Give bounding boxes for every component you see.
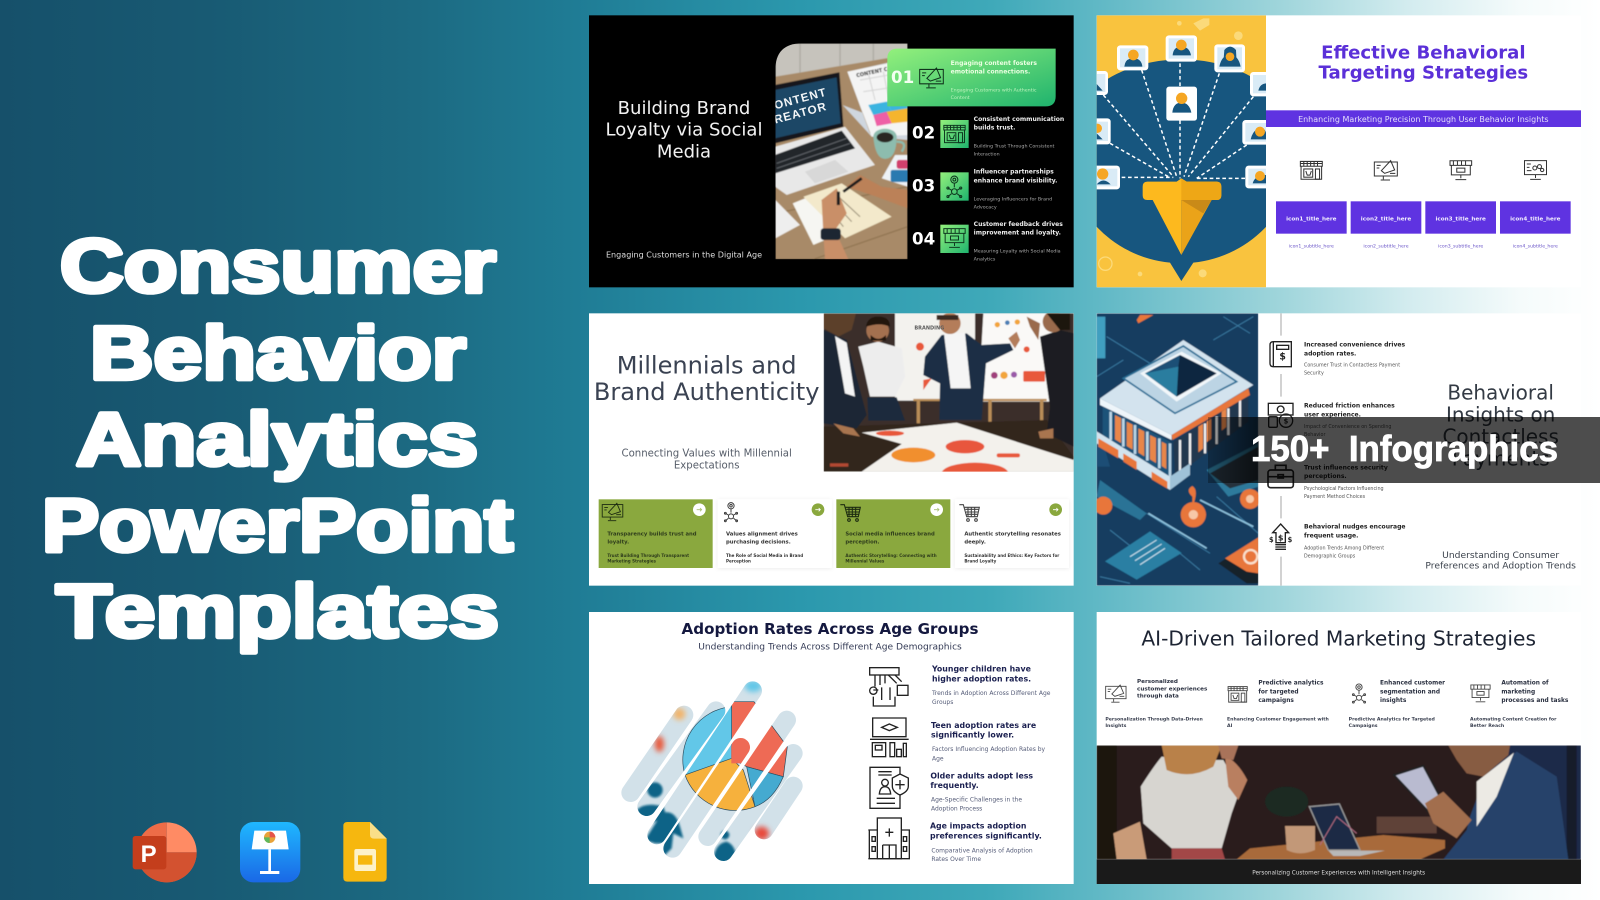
- subtitle: consumer preferences: Understanding Consumer: [1442, 550, 1559, 561]
- heading: effective behavioral targeting: [1319, 43, 1528, 83]
- illustration: funnel and profiles: [1096, 15, 1266, 288]
- banner: subtitle: [1266, 110, 1581, 127]
- card: item 01 highlighted: [887, 49, 1056, 106]
- columns: [1103, 407, 1170, 477]
- pins: [1189, 486, 1196, 507]
- column: personalized: customer experiences: [1137, 686, 1208, 692]
- panel: behavioral targeting: [1065, 15, 1581, 287]
- boxes row: icon1_subtitle_here: [1289, 243, 1334, 249]
- column: personalized: through data: [1137, 693, 1179, 699]
- icon and text: older adults: Age-Specific Challenges in the: [931, 797, 1022, 804]
- item: convenience: adoption rates.: [1304, 350, 1356, 357]
- icon and text: teen adoption: [870, 718, 1046, 762]
- card: item 01 highlighted: Content: [951, 95, 970, 101]
- column: automation: marketing: [1501, 689, 1535, 695]
- item: reduced friction: Behavior: [1304, 432, 1325, 438]
- icon and text: age impacts: preferences significantly.: [930, 831, 1042, 840]
- column: segmentation: insights: [1380, 698, 1407, 704]
- title: Templates: [56, 569, 499, 653]
- item: reduced friction: [1268, 402, 1395, 438]
- column: personalized: Personalized: [1137, 679, 1178, 685]
- subtitle: digital age: Engaging Customers in the Digital Age: [606, 251, 762, 260]
- subtitle: consumer preferences: Preferences and Adoption Trends: [1425, 560, 1576, 571]
- card: values alignment: Perception: [726, 559, 751, 564]
- column: automation: Automation of: [1501, 681, 1549, 687]
- heading: building brand loyalty: [605, 98, 763, 162]
- icon and text: younger children: higher adoption rates.: [932, 674, 1031, 683]
- boxes row: icon3_subtitle_here: [1438, 243, 1483, 249]
- photo: customer conversation over tablet: [1097, 745, 1581, 859]
- card: values alignment: The Role of Social Media in Brand: [726, 553, 803, 558]
- heading: contactless payments: Payments: [1452, 446, 1550, 470]
- card: authentic storytelling: deeply.: [964, 539, 986, 545]
- heading: adoption rates: Adoption Rates Across Age Groups: [682, 620, 978, 638]
- icon and text: teen adoption: Teen adoption rates are: [931, 721, 1036, 730]
- icon and text: age impacts: Rates Over Time: [931, 856, 981, 863]
- card: values alignment: [718, 499, 832, 568]
- photo: team at branding board: [824, 311, 1074, 484]
- app icons: [133, 822, 387, 882]
- column: predictive analytics: AI: [1227, 723, 1233, 729]
- item: reduced friction: user experience.: [1304, 411, 1361, 418]
- column: automation: [1470, 681, 1569, 729]
- item 02: 02: [912, 124, 935, 143]
- column: segmentation: segmentation and: [1380, 689, 1440, 695]
- icon and text: younger children: [870, 665, 1051, 706]
- panel: building brand loyalty: [589, 15, 1074, 287]
- laptop: [775, 72, 843, 143]
- chart: sliced pie illustration: [621, 681, 803, 861]
- item: behavioral nudges: $: [1288, 536, 1293, 544]
- item 02: builds trust.: [974, 125, 1015, 132]
- item 03: [912, 169, 1057, 210]
- overlay band: 150+ Infographics: 150+ Infographics: [1251, 428, 1558, 469]
- icon and text: age impacts: Comparative Analysis of Adoption: [931, 847, 1033, 854]
- heading: contactless payments: Insights on: [1446, 402, 1555, 426]
- title: Behavior: [90, 311, 466, 395]
- icon and text: teen adoption: significantly lower.: [931, 731, 1014, 740]
- heading: millennials: Brand Authenticity: [594, 378, 819, 406]
- icon and text: teen adoption: Factors Influencing Adoption Rates by: [932, 746, 1046, 753]
- card: social media: Authentic Storytelling: Connecting with: [845, 553, 937, 558]
- card: social media: Social media influences brand: [845, 532, 935, 538]
- photo: team at branding board: BRANDING: [914, 325, 944, 331]
- item 03: Advocacy: [974, 204, 997, 210]
- item: reduced friction: Impact of Convenience on Spending: [1304, 424, 1391, 430]
- card: transparency: loyalty.: [607, 539, 629, 545]
- item 02: Interaction: [974, 152, 1000, 158]
- data card and tablet: [1105, 531, 1182, 580]
- icon and text: older adults: Older adults adopt less: [930, 771, 1033, 780]
- card: item 01 highlighted: Engaging content fosters: [951, 60, 1037, 67]
- item: convenience: Increased convenience drives: [1304, 342, 1406, 349]
- illustration: isometric bank: [1094, 313, 1260, 586]
- heading: building brand loyalty: Media: [657, 141, 711, 162]
- card: values alignment: Values alignment drives: [726, 532, 798, 538]
- item 03: 03: [912, 176, 935, 195]
- photo: content creator desk: CONTENT C: [856, 67, 889, 79]
- screen text: REATOR: [773, 100, 828, 127]
- item 04: Measuring Loyalty with Social Media: [974, 249, 1061, 255]
- item: behavioral nudges: Demographic Groups: [1304, 553, 1356, 559]
- icon: PowerPoint: P: [141, 841, 157, 868]
- item: convenience: Consumer Trust in Contactless Payment: [1304, 363, 1400, 369]
- item: behavioral nudges: frequent usage.: [1304, 532, 1358, 539]
- card: item 01 highlighted: 01: [891, 68, 914, 87]
- boxes row: icon4_subtitle_here: [1513, 243, 1558, 249]
- item: reduced friction: $: [1284, 417, 1289, 425]
- overlay band: 150+ Infographics: [1208, 417, 1600, 483]
- item 04: improvement and loyalty.: [974, 230, 1061, 237]
- item: convenience: $: [1279, 351, 1286, 362]
- card: authentic storytelling: Brand Loyalty: [964, 559, 997, 564]
- item 04: [912, 221, 1063, 262]
- panel: behavioral insights on contactless payments: [1094, 313, 1581, 586]
- column: automation: Automating Content Creation for: [1470, 717, 1557, 723]
- item: trust and security: Psychological Factors Influencing: [1304, 486, 1384, 492]
- column: predictive analytics: campaigns: [1258, 698, 1294, 704]
- item 02: Consistent communication: [974, 116, 1064, 123]
- heading: contactless payments: [1442, 380, 1559, 470]
- card: values alignment: purchasing decisions.: [726, 539, 791, 545]
- column: personalized: Insights: [1105, 723, 1127, 729]
- card: social media: Millennial Values: [845, 559, 885, 564]
- column: segmentation: Campaigns: [1349, 723, 1378, 729]
- column: predictive analytics: Enhancing Customer Engagement with: [1227, 717, 1329, 723]
- item: trust and security: Trust influences security: [1304, 464, 1388, 471]
- item 02: Building Trust Through Consistent: [974, 144, 1054, 150]
- item: convenience: [1270, 342, 1406, 377]
- caption bar: Personalizing Customer Experiences with Intelligent Insights: [1252, 870, 1425, 876]
- card: social media: [836, 499, 950, 568]
- item: behavioral nudges: Adoption Trends Among Different: [1304, 545, 1384, 551]
- icon and text: older adults: [870, 767, 1033, 813]
- card: social media: perception.: [845, 539, 880, 545]
- title: Consumer: [60, 224, 496, 308]
- icon and text: age impacts: [868, 818, 1042, 863]
- heading: effective behavioral targeting: Targeting Strategies: [1319, 62, 1528, 83]
- item 03: Influencer partnerships: [974, 169, 1054, 176]
- caption bar: [1097, 859, 1581, 884]
- cup: [873, 137, 897, 159]
- column: personalized: [1105, 679, 1208, 729]
- boxes row: icon2_title_here: [1361, 216, 1411, 222]
- icon: Keynote: [240, 822, 300, 882]
- column: segmentation: Enhanced customer: [1380, 681, 1445, 687]
- heading: effective behavioral targeting: Effective Behavioral: [1321, 43, 1526, 64]
- boxes row: icon2_subtitle_here: [1363, 243, 1409, 249]
- item 04: Analytics: [974, 256, 996, 262]
- notebook and hands: [775, 200, 800, 238]
- item: convenience: Security: [1304, 371, 1324, 377]
- column: personalized: Personalization Through Data-Driven: [1105, 717, 1203, 723]
- column: predictive analytics: [1227, 681, 1329, 729]
- heading: millennials: Millennials and: [617, 352, 797, 380]
- item: behavioral nudges: [1269, 524, 1406, 559]
- panel: adoption rates across age groups: [589, 612, 1074, 884]
- heading: contactless payments: Contactless: [1442, 424, 1559, 448]
- social card: [882, 155, 908, 187]
- calendar: [843, 58, 908, 140]
- column: predictive analytics: for targeted: [1258, 689, 1299, 695]
- item: reduced friction: Reduced friction enhances: [1304, 402, 1395, 409]
- item: behavioral nudges: $: [1269, 536, 1274, 544]
- boxes row: icon1_title_here: [1286, 216, 1337, 222]
- column: segmentation: [1349, 681, 1445, 729]
- item 03: enhance brand visibility.: [974, 177, 1057, 184]
- item: trust and security: perceptions.: [1304, 473, 1347, 480]
- card: transparency: Marketing Strategies: [607, 559, 657, 564]
- item 04: Customer feedback drives: [974, 221, 1063, 228]
- card: authentic storytelling: Authentic storytelling resonates: [964, 532, 1061, 538]
- card: authentic storytelling: Sustainability and Ethics: Key Factors for: [964, 553, 1059, 558]
- banner: subtitle: Enhancing Marketing Precision Through User Behavior Insights: [1298, 115, 1549, 124]
- item: trust and security: [1268, 464, 1388, 500]
- column: automation: processes and tasks: [1501, 698, 1569, 704]
- item 03: Leveraging Influencers for Brand: [974, 196, 1052, 202]
- subtitle: connecting values: Expectations: [674, 461, 740, 472]
- card: item 01 highlighted: emotional connections.: [951, 69, 1030, 76]
- icon: PowerPoint: [133, 822, 197, 882]
- panel: millennials and brand authenticity: [589, 311, 1074, 586]
- icon and text: younger children: Trends in Adoption Across Different Age: [931, 690, 1051, 697]
- item 04: 04: [912, 230, 935, 249]
- icon: Google Slides: [343, 822, 387, 882]
- icon and text: older adults: Adoption Process: [931, 806, 982, 813]
- photo: content creator desk: [773, 43, 909, 259]
- icon and text: younger children: Groups: [932, 699, 953, 706]
- platform: [1207, 443, 1258, 497]
- title: PowerPoint: [42, 483, 513, 567]
- roof: [1100, 340, 1253, 435]
- item: behavioral nudges: $: [1278, 534, 1284, 543]
- card: transparency: Trust Building Through Transparent: [607, 553, 689, 558]
- subtitle: connecting values: Connecting Values with Millennial: [621, 449, 792, 460]
- timeline: vertical line segments: [1279, 313, 1283, 586]
- icon and text: older adults: frequently.: [930, 781, 979, 790]
- boxes row: icon4_title_here: [1510, 216, 1561, 222]
- subtitle: age demographics: Understanding Trends Across Different Age Demographics: [698, 642, 962, 652]
- screen text: [775, 88, 826, 124]
- icon and text: age impacts: Age impacts adoption: [930, 822, 1026, 831]
- heading: building brand loyalty: Building Brand: [618, 98, 750, 119]
- subtitle: connecting values: [621, 449, 792, 472]
- heading: millennials: [594, 352, 819, 406]
- title: Analytics: [76, 397, 478, 481]
- item: behavioral nudges: Behavioral nudges encourage: [1304, 524, 1406, 531]
- card: authentic storytelling: [955, 499, 1069, 568]
- card: item 01 highlighted: Engaging Customers with Authentic: [951, 88, 1037, 94]
- card: transparency: [599, 499, 713, 568]
- item: trust and security: Payment Method Choices: [1304, 494, 1366, 500]
- icons row: [1300, 161, 1546, 180]
- screen text: ONTENT: [773, 86, 828, 112]
- column: segmentation: Predictive Analytics for Targeted: [1349, 717, 1435, 723]
- column: predictive analytics: Predictive analytics: [1258, 681, 1324, 687]
- boxes row: icon3_title_here: [1435, 216, 1486, 222]
- panel: AI-driven tailored marketing: [1097, 612, 1581, 884]
- subtitle: consumer preferences: [1425, 550, 1576, 571]
- heading: AI-driven: AI-Driven Tailored Marketing Strategies: [1141, 627, 1536, 651]
- title: [42, 224, 513, 653]
- icon and text: younger children: Younger children have: [931, 665, 1031, 674]
- column: automation: Better Reach: [1470, 723, 1504, 729]
- card: transparency: Transparency builds trust and: [607, 532, 697, 538]
- item 02: [912, 116, 1064, 158]
- icon and text: teen adoption: Age: [932, 755, 944, 762]
- heading: contactless payments: Behavioral: [1447, 380, 1554, 404]
- boxes row: [1276, 201, 1571, 249]
- heading: building brand loyalty: Loyalty via Social: [605, 120, 763, 141]
